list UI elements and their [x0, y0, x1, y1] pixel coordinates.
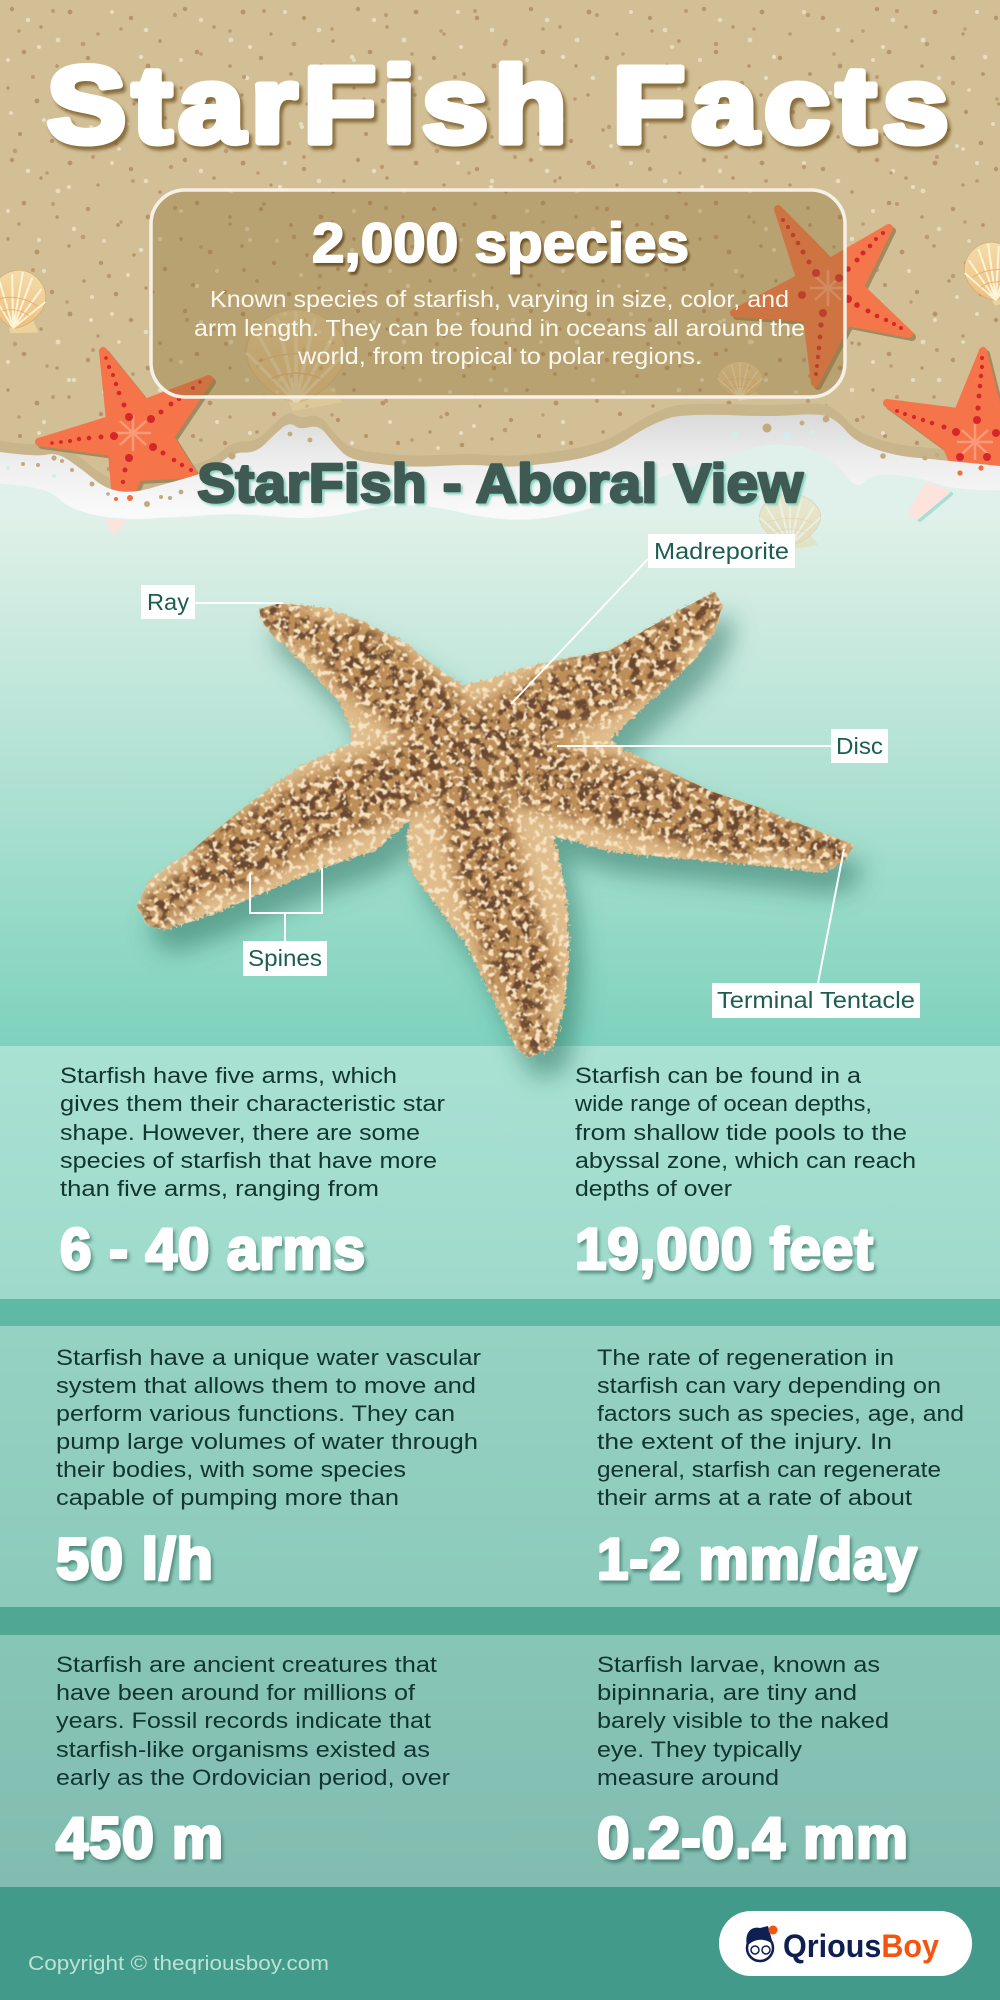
- text block: depths: abyssal zone, which can reach: [575, 1148, 916, 1173]
- label: Spines: [243, 868, 327, 976]
- wordmark: QriousBoy: [783, 1928, 939, 1964]
- text block: ancient: early as the Ordovician period, over: [56, 1765, 451, 1790]
- text block: water vascular: system that allows them to move and: [56, 1373, 476, 1398]
- text block: arms: than five arms, ranging from: [60, 1176, 379, 1201]
- icon: submerged shell: [759, 494, 821, 550]
- footer band: [0, 1887, 1000, 2000]
- label: Ray: [141, 585, 283, 619]
- label: Madreporite: [511, 534, 795, 704]
- stat: 6 - 40 arms: 6 - 40 arms: [60, 1217, 366, 1282]
- text block: depths: wide range of ocean depths,: [574, 1091, 872, 1116]
- band: divider 1: [0, 1299, 1000, 1326]
- icon: shell right: [961, 239, 1000, 309]
- panel: fact row 1 background: [0, 1046, 1000, 1299]
- text block: larvae: measure around: [597, 1765, 779, 1790]
- text block: arms: [60, 1063, 446, 1201]
- fact: larvae: [597, 1652, 909, 1871]
- label: Terminal Tentacle: [712, 849, 920, 1018]
- stat: 19,000 feet: 19,000 feet: [575, 1217, 874, 1282]
- fact: number of arms: [60, 1063, 446, 1282]
- icon: boy face with bulb: [746, 1926, 778, 1961]
- text block: ancient: Starfish are ancient creatures that: [56, 1652, 438, 1677]
- text block: arms: Starfish have five arms, which: [60, 1063, 397, 1088]
- text block: ancient: have been around for millions of: [56, 1680, 416, 1705]
- icon: small shell: [718, 362, 762, 401]
- title: StarFish Facts: [47, 44, 955, 165]
- text block: regeneration: [597, 1345, 964, 1510]
- icon: shell behind box: [246, 309, 346, 411]
- label: Ray: Ray: [147, 589, 190, 615]
- text block: species description: [194, 286, 805, 369]
- icon: shell left: [0, 266, 50, 338]
- fact: ancient creatures: [56, 1652, 451, 1871]
- wet sand band: [0, 403, 1000, 549]
- text block: regeneration: general, starfish can regenerate: [597, 1457, 941, 1482]
- icon: pale submerged arm right: [910, 484, 951, 520]
- text block: water vascular: Starfish have a unique water vascular: [56, 1345, 482, 1370]
- text block: depths: depths of over: [575, 1176, 733, 1201]
- starfish shadow: [149, 614, 866, 1079]
- text block: arms: species of starfish that have more: [60, 1148, 437, 1173]
- starfish photo illustration: [137, 592, 854, 1057]
- stat: 0.2-0.4 mm: 0.2-0.4 mm: [597, 1806, 909, 1871]
- text block: water vascular: perform various functions. They can: [56, 1401, 455, 1426]
- fact: ocean depths: [574, 1063, 916, 1282]
- text block: larvae: [597, 1652, 889, 1790]
- water lower fill: [0, 520, 1000, 580]
- text block: arms: shape. However, there are some: [60, 1120, 420, 1145]
- text block: regeneration: The rate of regeneration in: [597, 1345, 894, 1370]
- foam wave: [0, 414, 1000, 560]
- text block: regeneration: starfish can vary depending on: [597, 1373, 941, 1398]
- stat: species count: 2,000 species: [312, 211, 689, 274]
- panel: fact row 2 background: [0, 1326, 1000, 1607]
- heading: aboral view: StarFish - Aboral View: [197, 452, 803, 514]
- foam bubbles: [6, 416, 984, 507]
- label: Spines: Spines: [248, 945, 322, 971]
- water background: [0, 480, 1000, 1080]
- fact: regeneration: [597, 1345, 964, 1592]
- text block: larvae: eye. They typically: [597, 1737, 803, 1762]
- text block: ancient: starfish-like organisms existed as: [56, 1737, 430, 1762]
- fact: water vascular system: [56, 1345, 482, 1592]
- text block: depths: from shallow tide pools to the: [575, 1120, 907, 1145]
- panel: 2,000 species: [151, 190, 845, 397]
- text block: regeneration: their arms at a rate of about: [597, 1485, 913, 1510]
- text block: species description: world, from tropical to polar regions.: [297, 343, 702, 369]
- panel: fact row 3 background: [0, 1635, 1000, 1887]
- stat: 50 l/h: 50 l/h: [56, 1527, 214, 1592]
- icon: starfish right: [887, 351, 1000, 483]
- icon: pale submerged arm left: [107, 520, 125, 533]
- text block: species description: Known species of starfish, varying in size, color, and: [210, 286, 789, 312]
- text block: water vascular: pump large volumes of water through: [56, 1429, 478, 1454]
- text block: species description: arm length. They can be found in oceans all around the: [194, 315, 805, 341]
- text block: water vascular: their bodies, with some species: [56, 1457, 406, 1482]
- text block: water vascular: capable of pumping more than: [56, 1485, 399, 1510]
- shallow water: [0, 444, 1000, 570]
- text block: larvae: barely visible to the naked: [597, 1708, 889, 1733]
- stat: 450 m: 450 m: [56, 1806, 224, 1871]
- label: Disc: [557, 729, 888, 763]
- stat: 1-2 mm/day: 1-2 mm/day: [597, 1527, 918, 1592]
- text block: ancient: years. Fossil records indicate that: [56, 1708, 432, 1733]
- text block: larvae: bipinnaria, are tiny and: [597, 1680, 857, 1705]
- text block: arms: gives them their characteristic star: [60, 1091, 446, 1116]
- logo: QriousBoy: [719, 1911, 972, 1976]
- text block: regeneration: factors such as species, age, and: [597, 1401, 964, 1426]
- label: Disc: Disc: [836, 733, 883, 759]
- text block: regeneration: the extent of the injury. In: [597, 1429, 892, 1454]
- text block: ancient: [56, 1652, 451, 1790]
- text block: larvae: Starfish larvae, known as: [597, 1652, 880, 1677]
- copyright: Copyright © theqriousboy.com: [28, 1953, 329, 1975]
- icon: starfish left: [39, 351, 212, 528]
- label: Terminal Tentacle: Terminal Tentacle: [717, 987, 915, 1013]
- band: divider 2: [0, 1607, 1000, 1635]
- text block: depths: [574, 1063, 916, 1201]
- text block: depths: Starfish can be found in a: [575, 1063, 862, 1088]
- label: Madreporite: Madreporite: [654, 538, 789, 564]
- sand beach: [0, 0, 1000, 530]
- text block: water vascular: [56, 1345, 482, 1510]
- icon: starfish upper right: [734, 209, 912, 386]
